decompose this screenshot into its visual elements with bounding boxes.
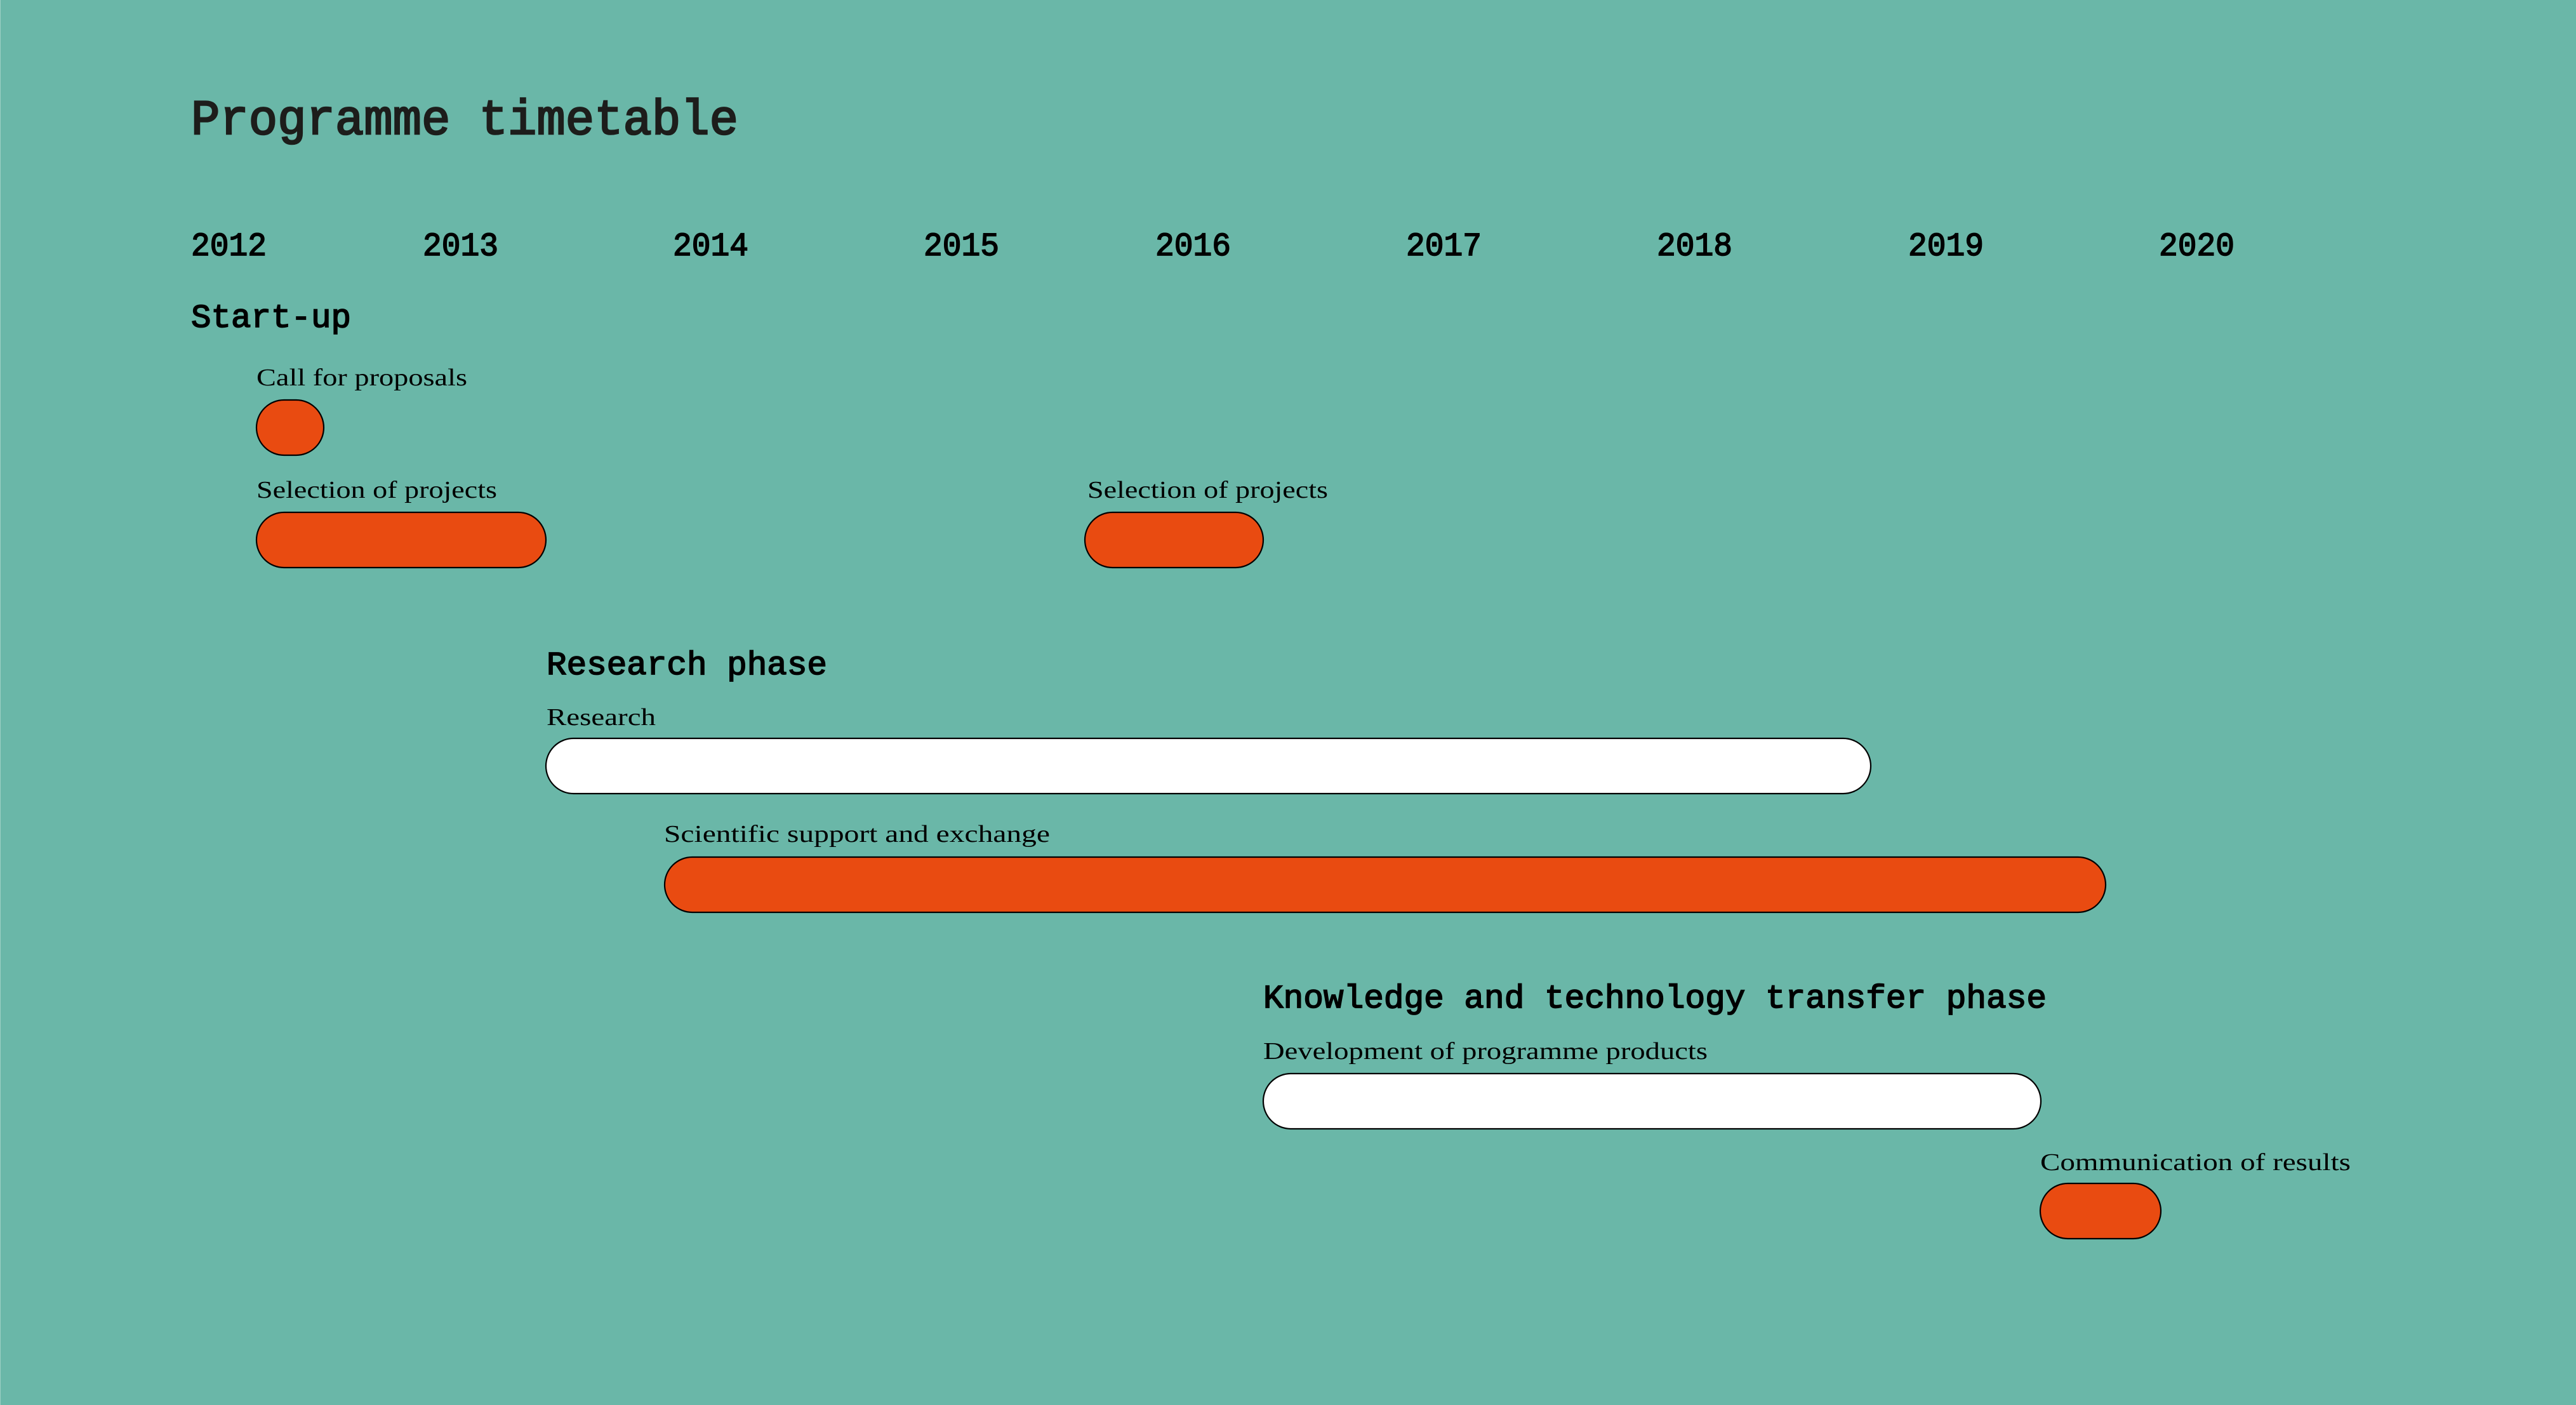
label: scientific support and exchange: Scientific support and exchange <box>664 821 1050 848</box>
bar: communication of results <box>2040 1183 2161 1239</box>
year 2013: 2013 <box>423 228 498 265</box>
bar: call for proposals <box>256 400 324 455</box>
year 2020: 2020 <box>2159 228 2234 265</box>
label: communication of results: Communication of results <box>2040 1149 2351 1176</box>
year 2019: 2019 <box>1908 228 1984 265</box>
bar: scientific support and exchange <box>665 857 2106 912</box>
bar: selection of projects <box>256 512 546 568</box>
year 2012: 2012 <box>191 228 267 265</box>
label: call for proposals: Call for proposals <box>256 364 467 391</box>
bar: development of programme products <box>1263 1074 2041 1129</box>
label: selection of projects: Selection of projects <box>256 477 497 503</box>
panel: research phase <box>546 647 2106 912</box>
panel: knowledge and technology transfer phase <box>1263 980 2351 1239</box>
year 2014: 2014 <box>673 228 748 265</box>
bar: research <box>546 738 1871 794</box>
heading: research phase: Research phase <box>547 647 827 684</box>
title: Programme timetable <box>191 93 738 149</box>
year 2015: 2015 <box>924 228 999 265</box>
label: research: Research <box>547 704 656 731</box>
label: development of programme products: Development of programme products <box>1263 1038 1708 1065</box>
heading: start-up: Start-up <box>191 300 351 337</box>
heading: knowledge and technology transfer phase: Knowledge and technology transfer phase <box>1263 980 2047 1018</box>
year 2017: 2017 <box>1406 228 1482 265</box>
year axis <box>191 228 2234 265</box>
year 2016: 2016 <box>1155 228 1231 265</box>
panel: start-up phase <box>191 300 1328 568</box>
label: selection of projects second round: Selection of projects <box>1087 477 1328 503</box>
year 2018: 2018 <box>1657 228 1732 265</box>
bar: selection of projects second round <box>1085 512 1263 568</box>
